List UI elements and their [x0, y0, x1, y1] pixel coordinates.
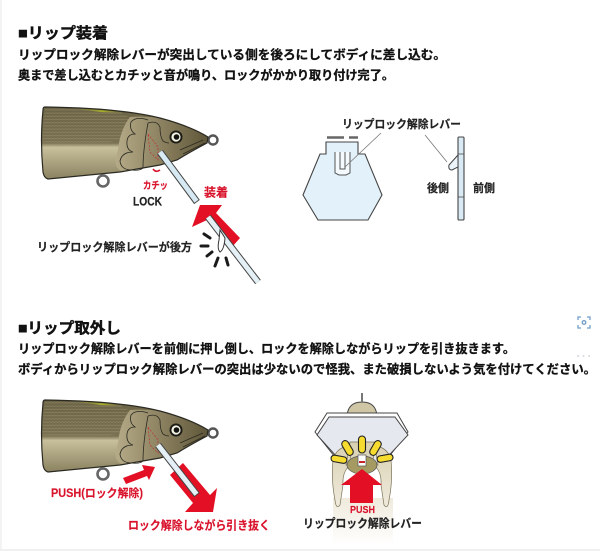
hand: [333, 498, 393, 545]
lure body: [42, 107, 218, 186]
leader line side: [425, 135, 447, 162]
arrow: push up: [341, 469, 382, 503]
lip in motion: [208, 217, 258, 282]
arrow: insert direction: [192, 205, 240, 247]
text block: attach instructions: リップロック解除レバーが突出している側を後ろにしてボディに差し込む。: [18, 47, 446, 62]
lure body: [42, 400, 218, 480]
arrow: push: [123, 465, 155, 484]
fingertips: [331, 436, 393, 464]
lip wide view: [315, 413, 408, 467]
diagram: lip front and side views: [303, 117, 495, 220]
leader line front: [345, 133, 381, 167]
text block: removal instructions: リップロック解除レバーを前側に押し倒し、ロックを解除しながらリップを引き抜きます。: [18, 341, 515, 356]
icon: more dots: [577, 355, 590, 357]
lip bar: [160, 152, 197, 202]
lure head seen from front: [347, 402, 377, 416]
arrow: pull out: [170, 463, 217, 512]
text block: removal instructions: [18, 341, 596, 376]
lever hook: [218, 230, 225, 252]
page edge: [0, 0, 2, 551]
label: click: カチッ: [143, 180, 168, 192]
illustration: fingers pushing lever: [303, 393, 422, 545]
label: release lever: リップロック解除レバー: [342, 117, 461, 131]
label: PUSH: PUSH: [350, 505, 375, 516]
impact marks: [201, 234, 228, 266]
heading: lip attach: ■リップ装着: [18, 24, 108, 42]
label: LOCK: LOCK: [133, 194, 162, 208]
illustration: lure with lip attach: [37, 107, 258, 282]
lip bar: [158, 445, 197, 495]
heading: lip removal: ■リップ取外し: [18, 319, 121, 337]
label: pull while unlocking: ロック解除しながら引き抜く: [128, 518, 270, 532]
illustration: lure with lip removal: [42, 400, 270, 532]
text block: attach instructions: 奥まで差し込むとカチッと音が鳴り、ロックがかかり取り付け完了。: [18, 68, 394, 82]
lock click mark: [153, 169, 160, 171]
text block: attach instructions: [18, 47, 446, 82]
lever boss: [347, 456, 377, 474]
text block: removal instructions: ボディからリップロック解除レバーの突出は少ないので怪我、また破損しないよう気を付けてください。: [18, 362, 596, 376]
lip side view: [449, 137, 464, 220]
icon: lens scan: [578, 317, 590, 328]
lip front view: [303, 138, 382, 220]
label: attach: 装着: [204, 184, 228, 200]
label: release lever: リップロック解除レバー: [303, 516, 422, 530]
label: push: PUSH(ロック解除): [51, 486, 143, 500]
label: lever rearward: リップロック解除レバーが後方: [37, 240, 192, 254]
label: rear side: 後側: [427, 181, 449, 195]
lever: [358, 455, 366, 466]
label: front side: 前側: [473, 181, 495, 195]
